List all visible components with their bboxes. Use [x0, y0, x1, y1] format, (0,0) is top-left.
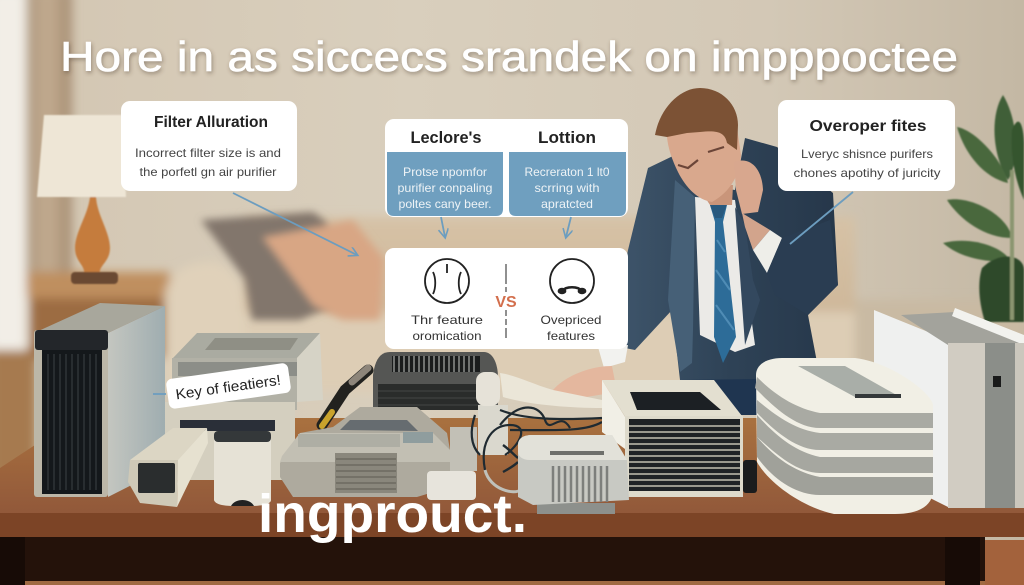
column: right blue cell: apratcted: [541, 197, 593, 211]
label: key of features: [166, 363, 291, 409]
device: white router: [518, 435, 629, 514]
title: Hore in as siccecs srandek on impppoctee: [60, 33, 958, 80]
caption: ingprouct: ingprouct.: [258, 484, 527, 544]
device: square camera-like purifier: [128, 428, 208, 507]
arrow: filter card to pillow: [233, 193, 357, 255]
panel: versus comparison: oromication: [412, 329, 482, 343]
panel: comparison columns: [385, 119, 628, 217]
shirt and tie: [695, 197, 755, 363]
card: overoper fites: chones apotihy of juricity: [794, 166, 940, 180]
device: silver desktop purifier: [280, 407, 450, 497]
table: [0, 418, 1024, 585]
device: grey printer purifier: [165, 333, 323, 480]
panel: versus comparison: [385, 248, 628, 349]
card: filter alluration: Incorrect filter size is and: [135, 146, 281, 160]
column: right blue cell: Recreraton 1 lt0: [524, 165, 610, 179]
device: small white cylinder: [214, 431, 271, 506]
arrow: overoper card to man: [790, 192, 853, 244]
device: cables and plug: [322, 368, 368, 426]
arrow: key features pointer: [153, 393, 166, 395]
card: filter alluration: the porfetl gn air purifier: [140, 165, 277, 179]
card: overoper fites: Overoper fites: [810, 118, 927, 135]
arrow: right column down: [566, 217, 571, 237]
device: stacked round purifier: [755, 358, 933, 514]
panel: versus comparison: Ovepriced: [540, 313, 602, 327]
column: left blue cell: Protse npomfor: [403, 165, 487, 179]
card: overoper fites: [778, 100, 955, 191]
panel: versus comparison: Thr feature: [411, 313, 483, 327]
divider with vs: [492, 264, 520, 338]
device: paper stack: [450, 372, 602, 471]
person: worried man in suit: [553, 88, 838, 415]
device: tall white box purifier: [874, 308, 1024, 508]
heading: Lottion: Lottion: [538, 129, 596, 147]
icon: feature dial: [425, 259, 469, 303]
column: left blue cell: [387, 152, 503, 216]
hand at ear: [734, 160, 838, 315]
label: key of features: Key of fieatiers!: [175, 373, 282, 403]
hand on papers: [553, 345, 628, 398]
column: left blue cell: poltes cany beer.: [398, 197, 492, 211]
device: grill-front white box: [602, 380, 757, 497]
device: tall tower purifier: [34, 303, 165, 497]
arrow: left column down: [441, 217, 445, 237]
pillow: grey: [201, 212, 345, 320]
column: right blue cell: scrring with: [534, 181, 600, 195]
column: right blue cell: [509, 152, 626, 216]
panel: versus comparison: features: [547, 329, 595, 343]
device: small white adapter: [427, 471, 476, 500]
icon: phone handset: [550, 259, 594, 303]
heading: Leclore's: Leclore's: [410, 129, 482, 147]
divider with vs: VS: [495, 294, 517, 311]
card: filter alluration: Filter Alluration: [154, 114, 268, 131]
pillow: peach: [262, 220, 384, 320]
device: black grille unit: [373, 352, 498, 410]
icon: table lamp: [37, 115, 126, 284]
column: left blue cell: purifier conpaling: [398, 181, 492, 195]
card: filter alluration: [121, 101, 297, 191]
icon: potted plant: [943, 95, 1024, 322]
card: overoper fites: Lveryc shisnce purifers: [801, 147, 933, 161]
device: tangled cable pile: [472, 408, 602, 492]
neck and face: [655, 88, 741, 205]
